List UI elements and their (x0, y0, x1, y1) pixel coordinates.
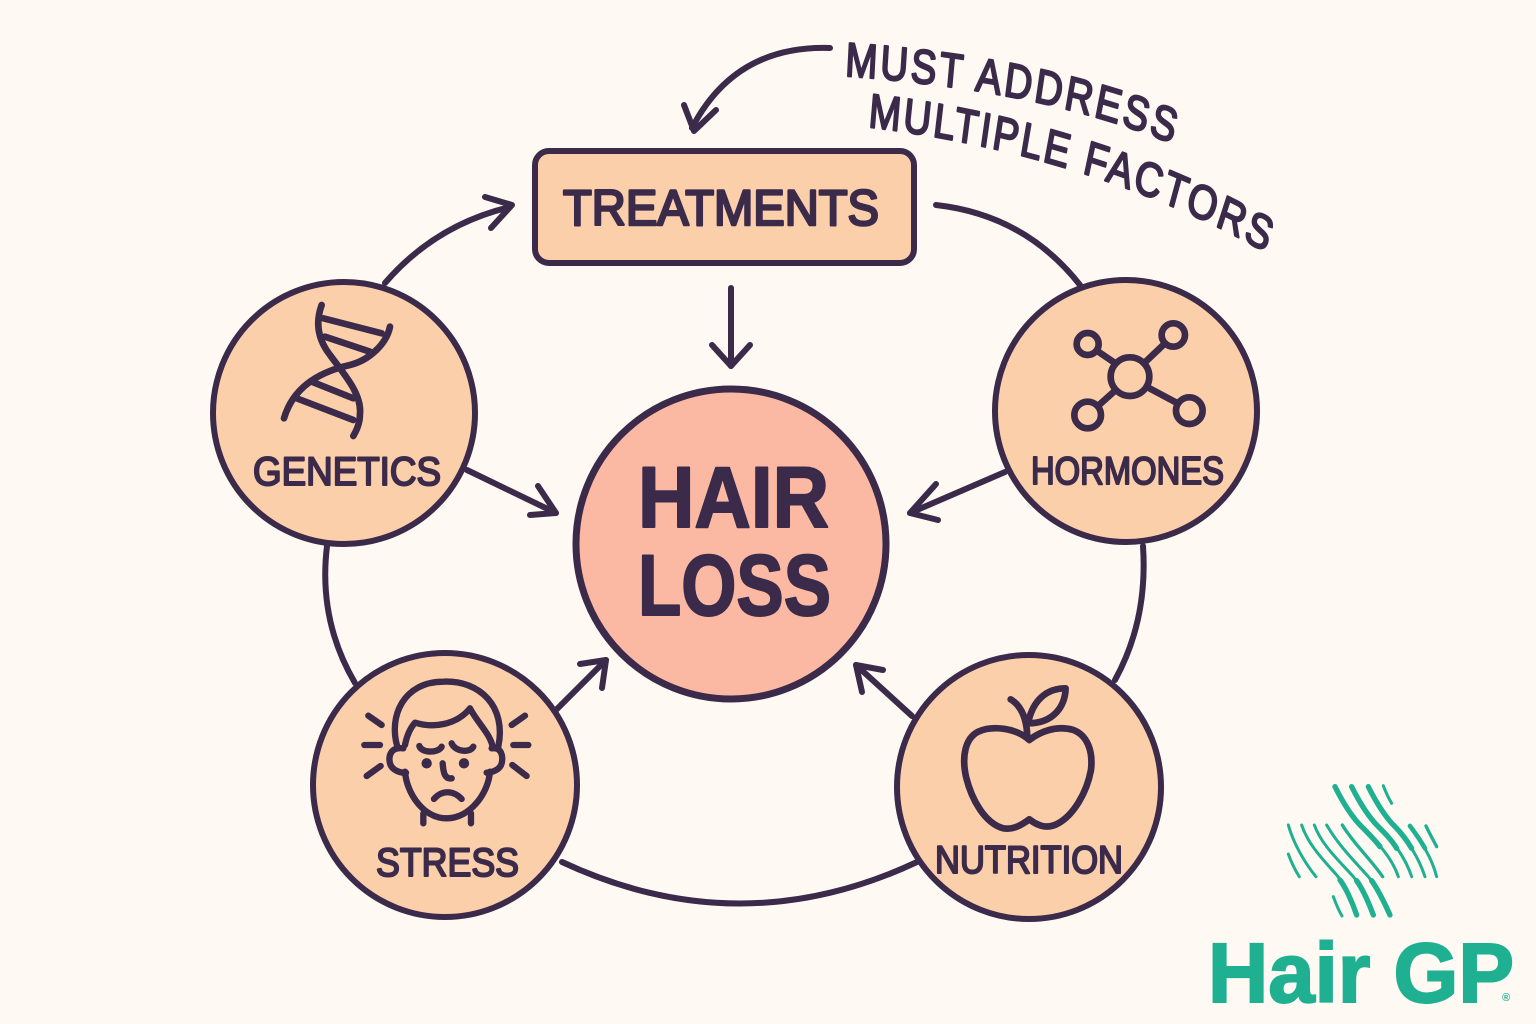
icon: molecule (1074, 323, 1203, 428)
heading: loss: LOSS (638, 538, 831, 634)
arrow: hormones to hair loss (910, 472, 1005, 520)
icon: apple (964, 688, 1091, 829)
registered mark: ® (1502, 992, 1510, 1004)
label: genetics: GENETICS (253, 450, 441, 494)
connector: genetics to treatments arrow (385, 197, 512, 283)
label: nutrition: NUTRITION (935, 839, 1123, 882)
arrow: stress to hair loss (556, 660, 606, 710)
panel: nutrition (897, 655, 1161, 919)
wordmark: Hair GP (1208, 926, 1514, 1020)
icon: hair strand cross (1288, 786, 1437, 916)
logo: Hair GP (1208, 786, 1514, 1020)
panel: treatments box (535, 151, 914, 263)
annotation: must address multiple factors: MULTIPLE FACTORS (870, 93, 1274, 250)
connector: hormones to nutrition (1115, 546, 1144, 680)
connector: stress to nutrition (562, 862, 917, 904)
arrow: treatments to hair loss (712, 288, 750, 366)
annotation: must address multiple factors: MUST ADDRESS (847, 42, 1178, 142)
arrow: genetics to hair loss (467, 470, 556, 515)
connector: treatments to hormones (936, 205, 1080, 285)
connector: genetics to stress (325, 546, 355, 683)
icon: stressed face (364, 682, 528, 823)
icon: dna helix (284, 305, 390, 436)
annotation: must address multiple factors (847, 42, 1274, 250)
arrow: nutrition to hair loss (856, 665, 912, 716)
label: stress: STRESS (376, 841, 519, 885)
panel: stress (313, 653, 577, 917)
arrow: note to treatments (684, 48, 830, 131)
panel: hair loss centre circle (576, 389, 886, 699)
panel: hormones (995, 280, 1257, 542)
panel: genetics (213, 282, 475, 544)
label: hormones: HORMONES (1031, 450, 1224, 493)
heading: hair: HAIR (638, 450, 829, 546)
label: treatments: TREATMENTS (563, 180, 879, 236)
